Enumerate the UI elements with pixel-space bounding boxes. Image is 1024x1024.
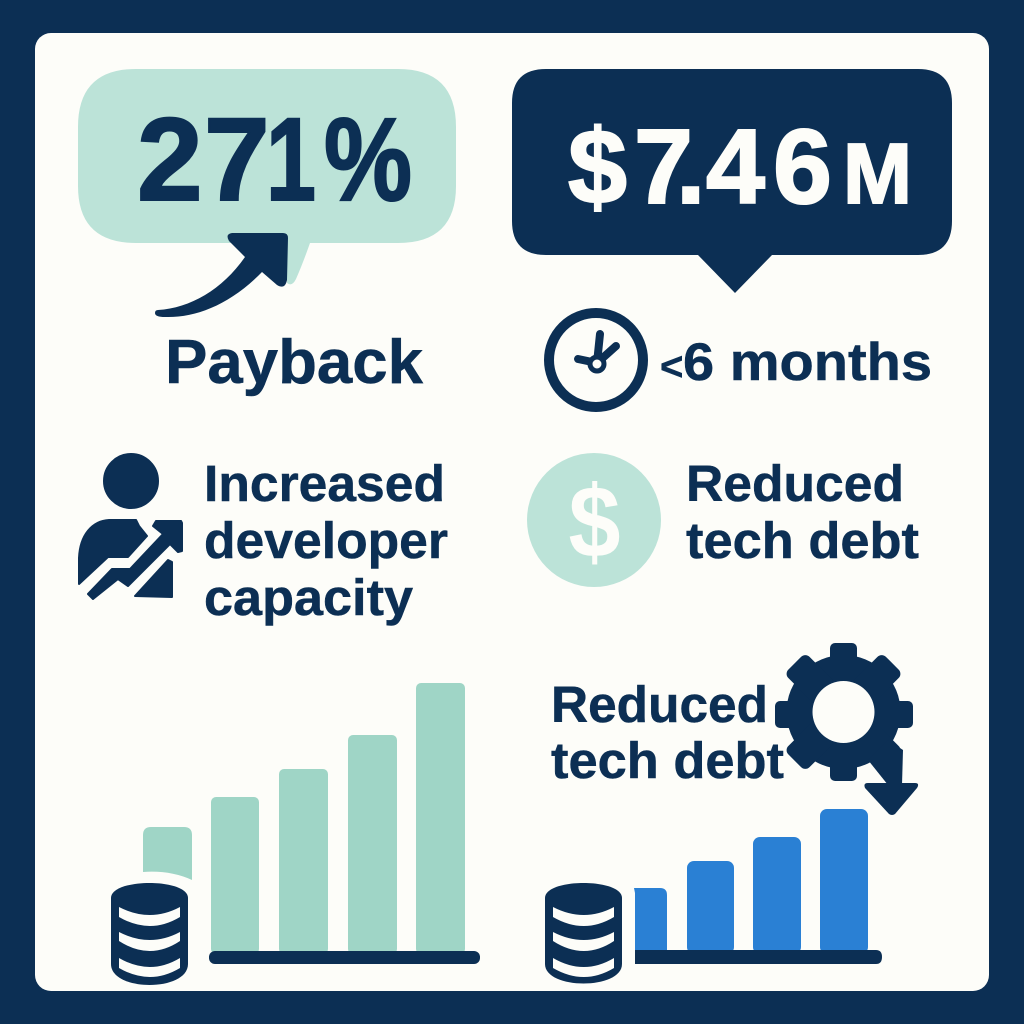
stat: $7.46M: M bbox=[843, 127, 912, 222]
stat: 271%: % bbox=[324, 94, 412, 226]
text: reduced tech debt lower: tech debt bbox=[551, 732, 784, 789]
icon: database left bbox=[111, 883, 188, 985]
text: reduced tech debt lower bbox=[551, 676, 784, 789]
text: reduced tech debt bbox=[686, 455, 919, 569]
icon: clock bbox=[549, 313, 643, 407]
text: increased developer capacity: capacity bbox=[204, 569, 414, 626]
icon: dollar coin bbox=[527, 453, 661, 587]
text: increased developer capacity: developer bbox=[204, 512, 448, 569]
text: increased developer capacity: Increased bbox=[204, 455, 445, 512]
icon: developer with growth arrow bbox=[79, 454, 182, 599]
stat: 271%: 1 bbox=[266, 94, 316, 226]
stat: 271%: 27 bbox=[137, 94, 270, 226]
stat: $7.46M: $7.46 bbox=[568, 108, 832, 226]
icon: gear with down arrow bbox=[775, 643, 918, 815]
callout: $7.46M bbox=[512, 69, 952, 293]
icon: database right bbox=[545, 883, 622, 984]
text: reduced tech debt: Reduced bbox=[686, 455, 904, 512]
text: reduced tech debt: tech debt bbox=[686, 512, 919, 569]
text: reduced tech debt lower: Reduced bbox=[551, 676, 768, 733]
heading: payback: Payback bbox=[165, 328, 424, 397]
text: increased developer capacity bbox=[204, 455, 448, 626]
bar chart: green bbox=[143, 683, 480, 964]
label: under 6 months: < bbox=[660, 345, 683, 389]
callout: 271% payback bbox=[78, 69, 456, 317]
icon: dollar coin: $ bbox=[568, 465, 620, 579]
label: under 6 months: 6 months bbox=[683, 333, 932, 392]
bar chart: blue bbox=[634, 809, 882, 964]
arrow: growth bbox=[155, 233, 288, 317]
